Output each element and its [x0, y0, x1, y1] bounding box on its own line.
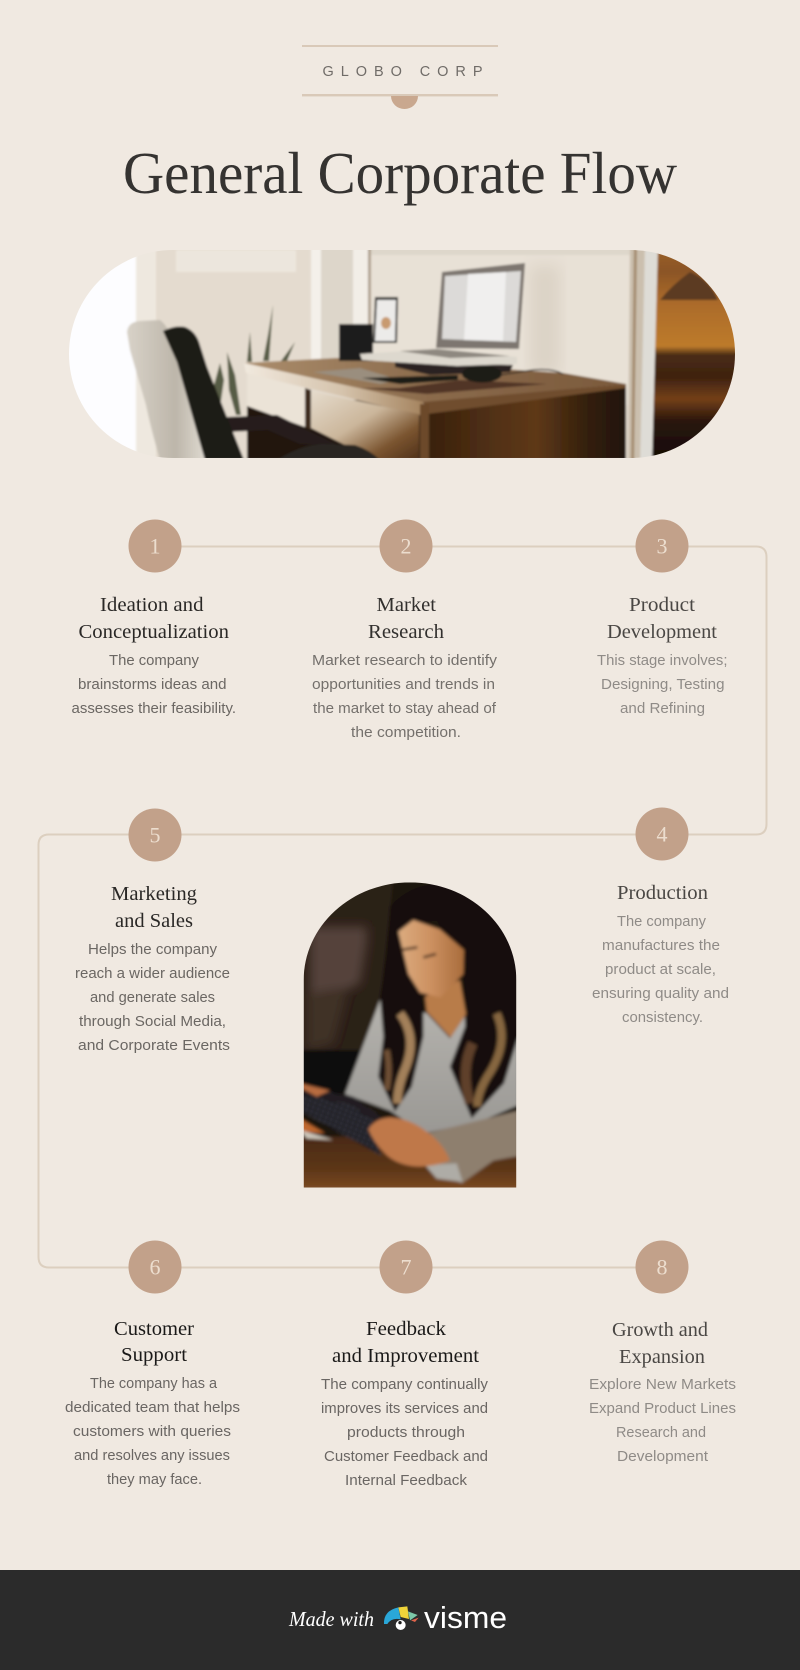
step 2: Market Research: opportunities and trends in — [312, 676, 495, 693]
step 8: Growth and Expansion: Development — [617, 1448, 709, 1465]
step 6: Customer Support: they may face. — [107, 1471, 202, 1488]
step 5: Marketing and Sales: and Sales — [115, 910, 193, 932]
desk — [244, 358, 626, 460]
door frame — [628, 245, 658, 465]
step 5: Marketing and Sales: Marketing — [111, 883, 197, 905]
step 2: Market Research: Market research to identify — [312, 652, 498, 669]
step 8: Growth and Expansion — [589, 1240, 736, 1465]
number badge 1 — [128, 520, 182, 572]
painting through doorway — [650, 253, 735, 456]
step 2: Market Research — [312, 520, 498, 741]
step 1: Ideation and Conceptualization: Conceptualization — [78, 621, 229, 643]
chair — [127, 320, 380, 460]
number badge 5 — [128, 808, 182, 862]
step 8: Growth and Expansion: Growth and — [612, 1319, 708, 1341]
step 7: Feedback and Improvement: and Improvement — [332, 1345, 479, 1367]
step 7: Feedback and Improvement: The company continually — [321, 1376, 488, 1393]
tablet — [304, 1089, 382, 1156]
hair — [378, 885, 518, 1118]
step 4: Production: consistency. — [622, 1009, 703, 1026]
step 1: Ideation and Conceptualization: brainstorms ideas and — [78, 676, 226, 693]
step 2: Market Research: Research — [368, 621, 444, 643]
icon: half circle marker — [391, 96, 418, 109]
step 4: Production: ensuring quality and — [592, 985, 729, 1002]
photo: desk with laptop in pill frame — [60, 245, 740, 465]
step 4: Production: The company — [617, 913, 706, 930]
number badge 8 — [636, 1240, 688, 1294]
step 1: Ideation and Conceptualization: 1 — [150, 534, 160, 558]
step 6: Customer Support — [65, 1240, 240, 1488]
step 8: Growth and Expansion: Research and — [616, 1424, 706, 1441]
step 2: Market Research: Market — [376, 594, 436, 616]
number badge 7 — [380, 1240, 432, 1294]
step 5: Marketing and Sales — [75, 808, 230, 1054]
sweater — [345, 1000, 518, 1133]
neck and face — [425, 980, 466, 1038]
flow connector line — [38, 546, 766, 1268]
step 8: Growth and Expansion: Expansion — [619, 1346, 705, 1368]
step 5: Marketing and Sales: 5 — [150, 822, 160, 848]
step 7: Feedback and Improvement: Feedback — [366, 1318, 447, 1340]
step 5: Marketing and Sales: reach a wider audience — [75, 965, 230, 982]
step 8: Growth and Expansion: Expand Product Lines — [589, 1400, 736, 1417]
step 2: Market Research: 2 — [400, 534, 412, 558]
step 6: Customer Support: dedicated team that helps — [65, 1399, 240, 1416]
step 5: Marketing and Sales: Helps the company — [88, 941, 217, 958]
step 5: Marketing and Sales: through Social Media, — [79, 1013, 226, 1030]
made with label: Made with — [288, 1607, 374, 1631]
step 3: Product Development: Development — [607, 621, 717, 643]
mirror frame — [311, 245, 371, 365]
hand — [368, 1117, 450, 1167]
step 5: Marketing and Sales: and Corporate Events — [78, 1037, 230, 1054]
step 8: Growth and Expansion: Explore New Markets — [589, 1376, 736, 1393]
step 1: Ideation and Conceptualization: The company — [109, 652, 199, 669]
step 1: Ideation and Conceptualization: Ideation and — [100, 594, 204, 616]
step 7: Feedback and Improvement: improves its services and — [321, 1400, 488, 1417]
step 6: Customer Support: customers with queries — [73, 1423, 231, 1440]
number badge 4 — [636, 808, 688, 860]
step 3: Product Development: Designing, Testing — [601, 676, 724, 693]
brand name: GLOBO CORP — [322, 64, 482, 80]
title: General Corporate Flow — [123, 140, 677, 206]
number badge 3 — [636, 520, 688, 572]
icon: visme logo — [384, 1606, 419, 1630]
step 6: Customer Support: Support — [121, 1344, 187, 1366]
step 3: Product Development: 3 — [656, 534, 668, 558]
sleeve — [427, 1111, 518, 1183]
step 3: Product Development: Product — [629, 594, 695, 616]
step 4: Production: product at scale, — [605, 961, 716, 978]
step 4: Production — [592, 808, 729, 1026]
step 1: Ideation and Conceptualization — [72, 520, 236, 717]
step 7: Feedback and Improvement — [321, 1240, 488, 1489]
step 5: Marketing and Sales: and generate sales — [90, 989, 215, 1006]
desk items — [313, 263, 563, 394]
step 4: Production: Production — [617, 882, 708, 904]
plant — [214, 305, 295, 415]
step 1: Ideation and Conceptualization: assesses their feasibility. — [72, 700, 236, 717]
step 3: Product Development — [597, 520, 728, 717]
step 3: Product Development: and Refining — [620, 700, 705, 717]
step 6: Customer Support: and resolves any issues — [74, 1447, 230, 1464]
step 2: Market Research: the market to stay ahead of — [313, 700, 497, 717]
footer bar — [0, 1570, 800, 1670]
photo: woman reading tablet in arch frame — [300, 880, 520, 1190]
step 6: Customer Support: Customer — [114, 1318, 194, 1340]
step 3: Product Development: This stage involves; — [597, 652, 728, 669]
header: Globo Corp badge — [302, 45, 498, 109]
number badge 2 — [380, 520, 432, 572]
step 8: Growth and Expansion: 8 — [656, 1254, 668, 1280]
step 7: Feedback and Improvement: 7 — [400, 1254, 412, 1280]
step 7: Feedback and Improvement: Customer Feedback and — [324, 1448, 488, 1465]
step 4: Production: 4 — [656, 822, 668, 846]
step 6: Customer Support: 6 — [150, 1254, 160, 1280]
visme wordmark: visme — [424, 1600, 507, 1635]
step 6: Customer Support: The company has a — [90, 1375, 218, 1392]
number badge 6 — [128, 1240, 182, 1294]
step 2: Market Research: the competition. — [351, 724, 461, 741]
step 7: Feedback and Improvement: Internal Feedback — [345, 1472, 468, 1489]
step 4: Production: manufactures the — [602, 937, 720, 954]
step 7: Feedback and Improvement: products through — [347, 1424, 465, 1441]
